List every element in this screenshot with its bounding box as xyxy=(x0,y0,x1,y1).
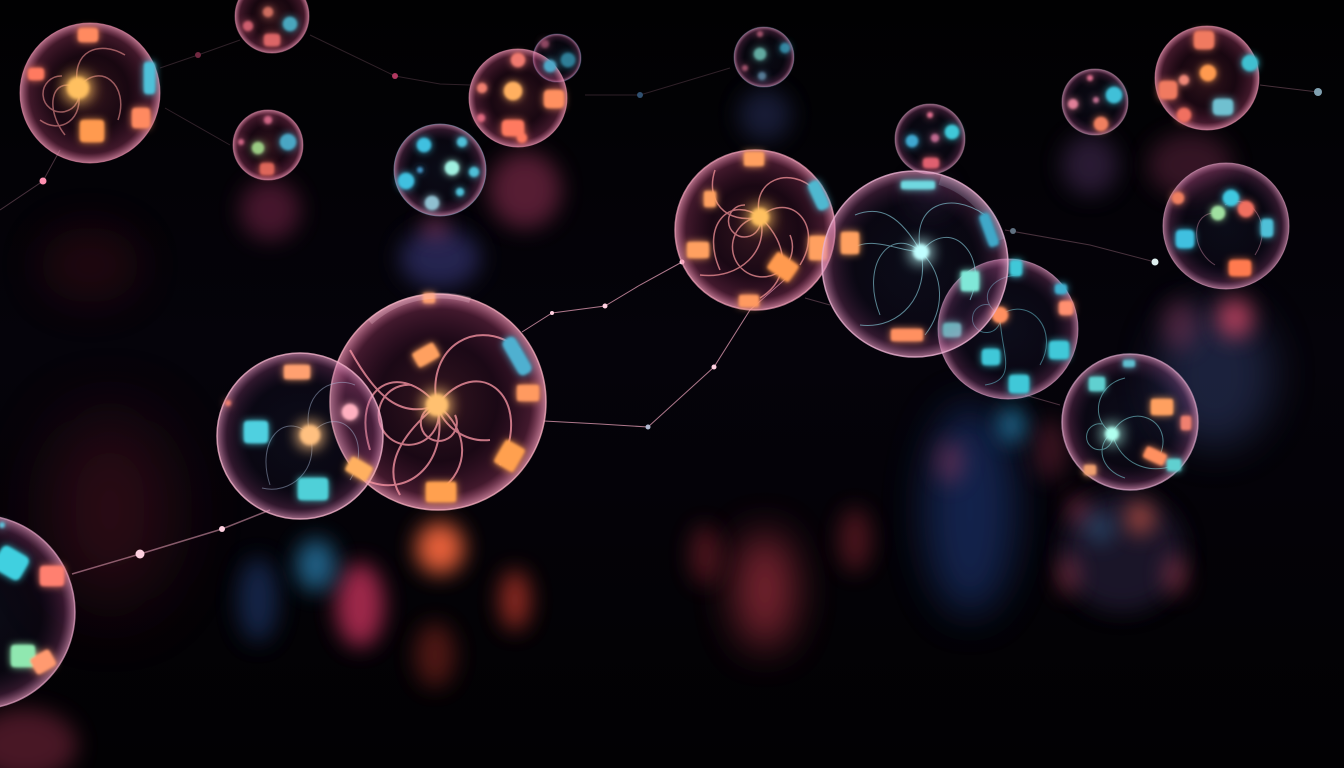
sphere: dim cyan top xyxy=(734,27,794,87)
sphere: pink centre right xyxy=(675,150,835,310)
sphere: fourth, lower right xyxy=(1062,354,1198,490)
sphere: large pink centre left xyxy=(330,293,546,510)
sphere: small top right xyxy=(1062,69,1128,135)
sphere: top left partial xyxy=(235,0,309,53)
sphere: small left xyxy=(233,110,303,180)
sphere: dim cyan behind pink xyxy=(533,34,581,82)
sphere: right mid xyxy=(1163,163,1289,289)
sphere: far left cut off xyxy=(0,515,75,709)
sphere: top right pink xyxy=(1155,26,1259,130)
sphere: pink top centre xyxy=(469,49,567,147)
sphere: cyan top centre xyxy=(394,124,486,216)
sphere: third right cluster xyxy=(938,259,1078,399)
sphere: top left large xyxy=(20,23,160,163)
connecting lines with nodes xyxy=(0,35,1322,574)
sphere: large cyan-core centre right xyxy=(822,171,1008,357)
sphere: mid left overlapping xyxy=(217,353,383,519)
sphere: small centre right xyxy=(895,104,965,174)
